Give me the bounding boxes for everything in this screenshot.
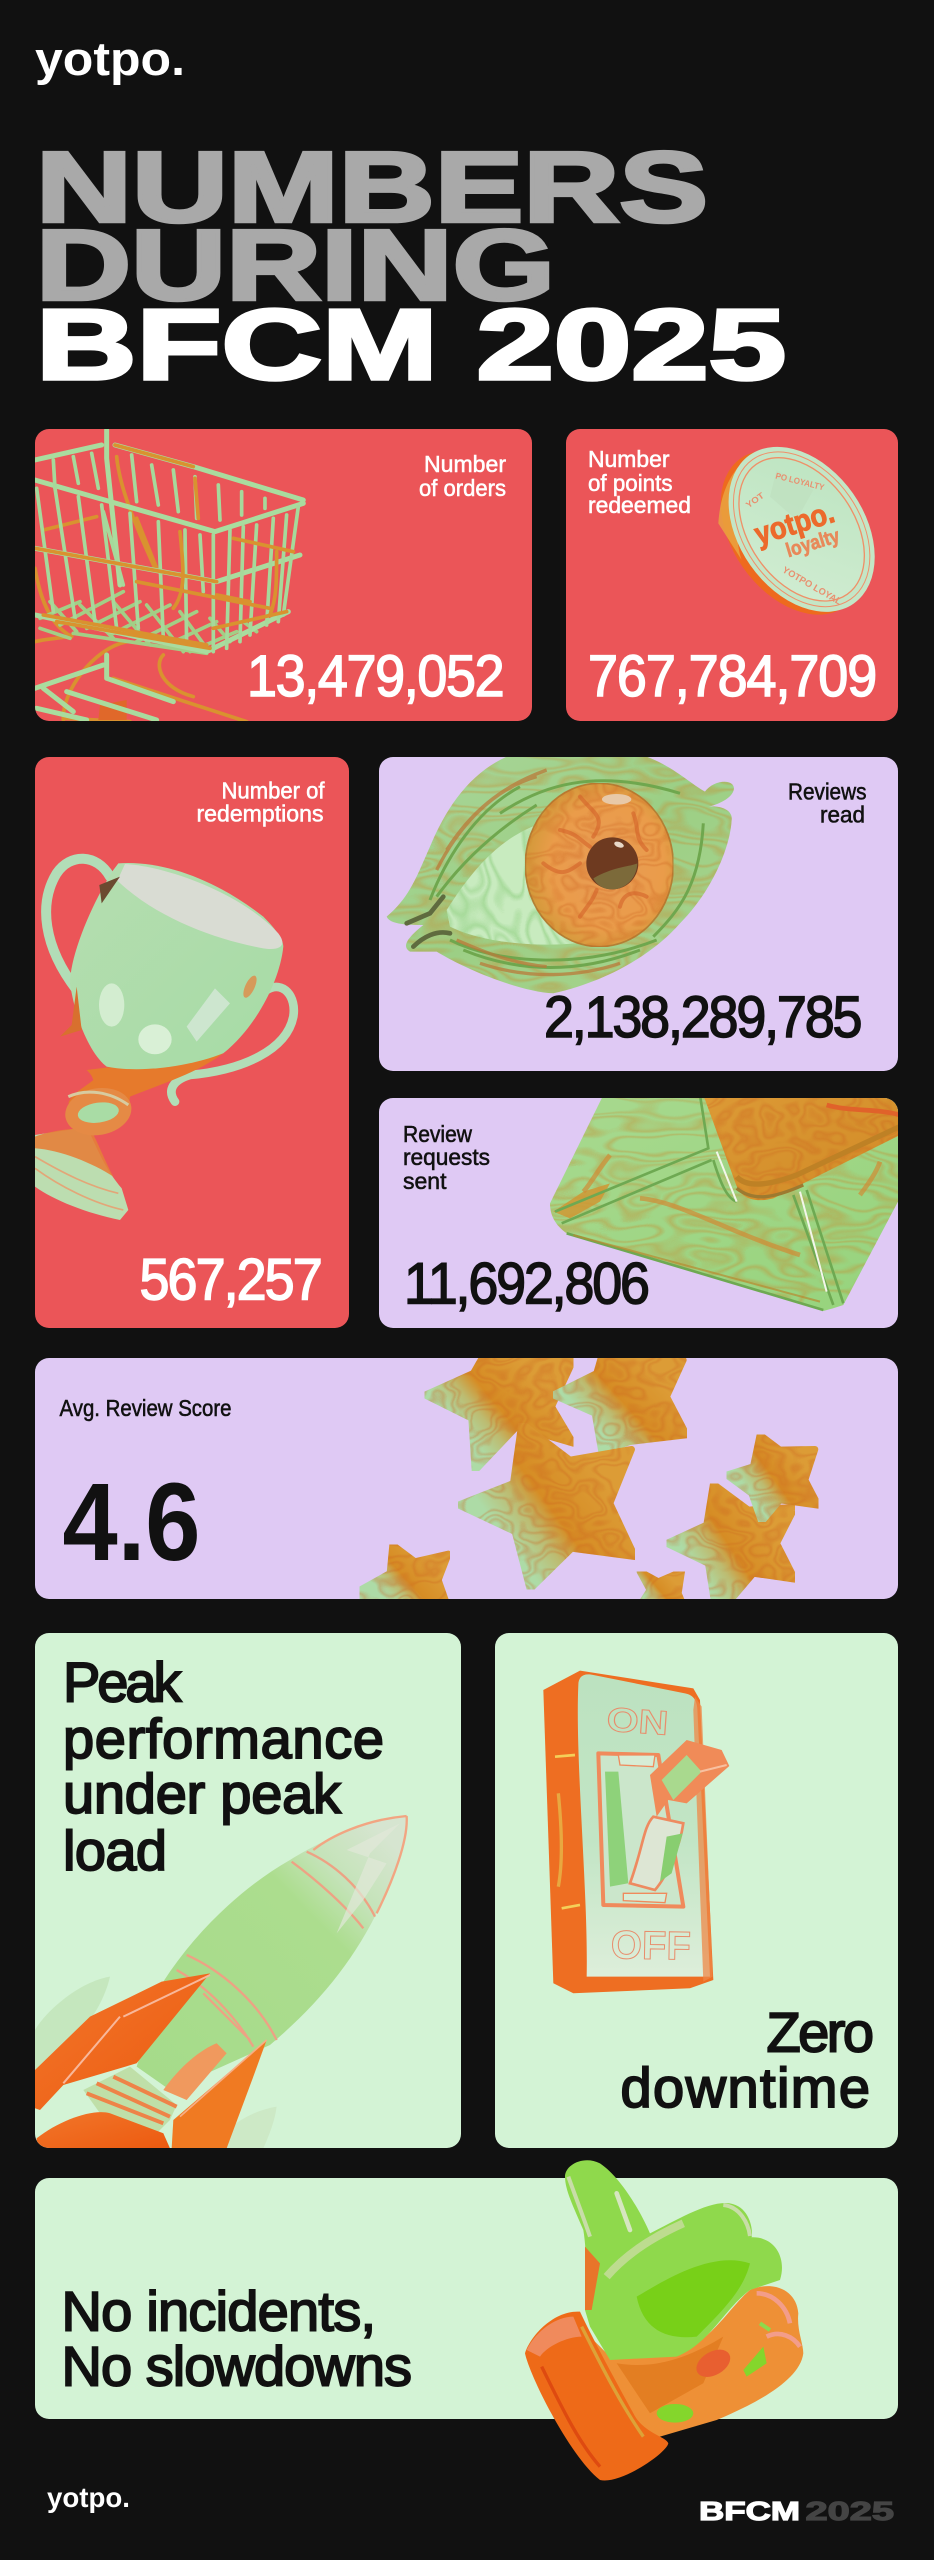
footer tag: BFCM 2025 bbox=[699, 2496, 894, 2526]
number: points: 767,784,709 bbox=[588, 643, 877, 708]
label: redemptions bbox=[196, 800, 324, 826]
heading: Zero bbox=[766, 2000, 874, 2064]
label: Reviews bbox=[788, 778, 866, 804]
panel: zero downtime bbox=[495, 1633, 898, 2148]
number: redemptions: 567,257 bbox=[140, 1247, 323, 1312]
title bbox=[36, 132, 786, 401]
label: sent bbox=[403, 1168, 447, 1194]
panel: peak performance bbox=[35, 1633, 461, 2148]
panel: reviews read bbox=[379, 757, 898, 1071]
heading bbox=[62, 2280, 412, 2398]
label: Number bbox=[588, 446, 670, 472]
heading bbox=[620, 2000, 874, 2119]
label: Number bbox=[424, 451, 506, 477]
number: average score: 4.6 bbox=[62, 1461, 200, 1584]
icon: shopping cart bbox=[35, 430, 303, 722]
label: requests bbox=[403, 1144, 490, 1170]
label: of points bbox=[588, 470, 672, 496]
icon: thumbs up bbox=[525, 2160, 803, 2480]
icon: on off switch bbox=[543, 1671, 729, 1993]
panel: average review score bbox=[35, 1350, 898, 1617]
panel: points redeemed bbox=[566, 419, 905, 721]
label: Review bbox=[403, 1121, 472, 1147]
heading: No incidents, bbox=[62, 2280, 376, 2342]
panel: redemptions bbox=[35, 757, 349, 1328]
footer tag: BFCM 2025: BFCM bbox=[699, 2496, 800, 2526]
logo: yotpo: yotpo. bbox=[35, 32, 185, 85]
number: reviews read: 2,138,289,785 bbox=[544, 984, 863, 1049]
label bbox=[196, 778, 325, 826]
label: redeemed bbox=[588, 492, 691, 518]
label: Avg. Review Score bbox=[60, 1395, 232, 1421]
title: DURING bbox=[36, 210, 555, 322]
label bbox=[419, 451, 506, 501]
label bbox=[588, 446, 691, 518]
title: NUMBERS bbox=[36, 132, 708, 244]
heading: downtime bbox=[620, 2056, 870, 2119]
label bbox=[403, 1121, 490, 1194]
number: orders: 13,479,052 bbox=[247, 643, 505, 708]
icon: loyalty coin bbox=[691, 419, 905, 642]
label: Number of bbox=[222, 778, 325, 804]
icon: eye bbox=[387, 757, 734, 993]
icon: loyalty coin: loyalty bbox=[783, 525, 842, 562]
footer tag: BFCM 2025: 2025 bbox=[806, 2496, 894, 2526]
icon: loyalty coin: PO LOYALTY bbox=[775, 471, 826, 492]
heading: performance bbox=[63, 1707, 384, 1770]
panel: no incidents bbox=[35, 2160, 898, 2480]
heading: No slowdowns bbox=[62, 2334, 412, 2398]
icon: on off switch: ON bbox=[605, 1701, 670, 1743]
heading: under peak bbox=[63, 1762, 342, 1825]
label bbox=[788, 778, 866, 828]
label: of orders bbox=[419, 475, 506, 501]
number: review requests: 11,692,806 bbox=[404, 1251, 650, 1316]
panel: review requests sent bbox=[379, 1095, 903, 1328]
icon: envelope bbox=[550, 1095, 903, 1311]
icon: trophy bbox=[35, 859, 294, 1220]
heading: load bbox=[63, 1819, 167, 1882]
heading bbox=[63, 1650, 384, 1882]
footer logo: yotpo: yotpo. bbox=[47, 2482, 130, 2513]
icon: loyalty coin: YOT bbox=[744, 490, 767, 510]
label: read bbox=[820, 802, 865, 828]
heading: Peak bbox=[63, 1650, 182, 1714]
panel: number of orders bbox=[35, 429, 532, 722]
title: BFCM 2025 bbox=[36, 289, 786, 401]
icon: on off switch: OFF bbox=[611, 1923, 691, 1969]
icon: rocket bbox=[35, 1816, 408, 2148]
icon: loyalty coin: yotpo. bbox=[750, 495, 838, 552]
icon: stars bbox=[360, 1350, 818, 1617]
icon: loyalty coin: YOTPO LOYAL bbox=[781, 565, 844, 607]
